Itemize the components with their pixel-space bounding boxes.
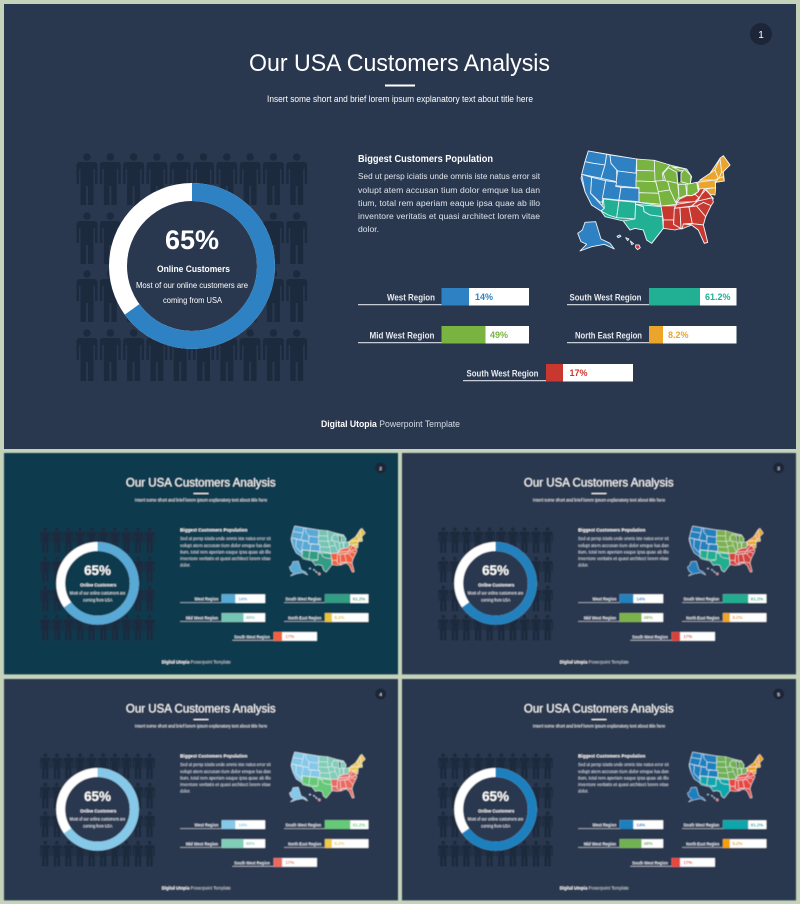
slide 5: navy thumbnail, vivid palette: 65% — [482, 789, 509, 804]
slide 3: navy thumbnail: South West Region — [632, 634, 668, 639]
slide 5: navy thumbnail, vivid palette: 17% — [683, 860, 692, 865]
slide 3: navy thumbnail: Mid West Region — [584, 615, 616, 620]
slide 4: navy thumbnail, pastel palette: 8.2% — [334, 841, 345, 846]
slide 3: navy thumbnail: tium, total rem aperiam eaque ipsa quae ab illo — [578, 549, 669, 554]
slide 4: navy thumbnail, pastel palette: Insert some short and brief lorem ipsum explanatory text about title here — [135, 724, 268, 729]
donut chart: 65% online customers — [118, 192, 266, 340]
slide 4: navy thumbnail, pastel palette: 17% — [285, 860, 294, 865]
bar: North East Region 8.2% — [567, 326, 736, 344]
slide 1: main navy slide — [4, 4, 796, 449]
text block: biggest customers population: Sed ut persp iciatis unde omnis iste natus error sit — [358, 171, 541, 181]
donut chart: 65% online customers: 65% — [165, 225, 219, 255]
slide 4: navy thumbnail, pastel palette: Sed ut persp iciatis unde omnis iste natus error sit — [180, 762, 271, 767]
slide 5: navy thumbnail, vivid palette: 14% — [636, 822, 645, 827]
slide 4: navy thumbnail, pastel palette: North East Region — [288, 841, 322, 846]
slide 2: teal thumbnail: West Region — [195, 596, 219, 601]
subtitle: Insert some short and brief lorem ipsum explanatory text about title here — [267, 94, 533, 104]
slide 5: navy thumbnail, vivid palette: 49% — [644, 841, 653, 846]
slide 4: navy thumbnail, pastel palette: Digital Utopia Powerpoint Template — [162, 885, 231, 890]
slide 3: navy thumbnail — [402, 453, 796, 674]
slide 5: navy thumbnail, vivid palette: Digital Utopia Powerpoint Template — [560, 885, 629, 890]
slide 4: navy thumbnail, pastel palette: 4 — [379, 692, 382, 698]
slide 2: teal thumbnail: dolor. — [180, 562, 191, 567]
slide 2: teal thumbnail: Our USA Customers Analysis — [126, 475, 276, 489]
slide 5: navy thumbnail, vivid palette: Most of our online customers are — [468, 816, 524, 821]
title: Our USA Customers Analysis — [249, 50, 550, 77]
slide 3: navy thumbnail: 49% — [644, 615, 653, 620]
slide 2: teal thumbnail: 49% — [246, 615, 255, 620]
slide 5: navy thumbnail, vivid palette: Insert some short and brief lorem ipsum explanatory text about title here — [533, 724, 666, 729]
slide 4: navy thumbnail, pastel palette — [4, 679, 398, 900]
page number badge — [750, 23, 772, 45]
slide 5: navy thumbnail, vivid palette: coming from USA — [481, 824, 511, 829]
slide 5: navy thumbnail, vivid palette: Biggest Customers Population — [578, 754, 645, 760]
slide 3: navy thumbnail: 65% — [482, 563, 509, 578]
slide 4: navy thumbnail, pastel palette: coming from USA — [83, 824, 113, 829]
slide 4: navy thumbnail, pastel palette: South West Region — [234, 860, 270, 865]
slide 2: teal thumbnail: volupt atem accusan tium dolor emque lua dan — [180, 543, 271, 548]
bar: Mid West Region 49%: 49% — [490, 330, 508, 340]
slide 3: navy thumbnail: Insert some short and brief lorem ipsum explanatory text about title here — [533, 498, 666, 503]
slide 4: navy thumbnail, pastel palette: Most of our online customers are — [70, 816, 126, 821]
slide 2: teal thumbnail: North East Region — [288, 615, 322, 620]
bar: West Region 14%: 14% — [475, 292, 493, 302]
slide background — [4, 4, 796, 449]
bar: Mid West Region 49%: Mid West Region — [370, 330, 434, 340]
slide 2: teal thumbnail: 14% — [238, 596, 247, 601]
slide 3: navy thumbnail: 14% — [636, 596, 645, 601]
slide 3: navy thumbnail: coming from USA — [481, 598, 511, 603]
slide 2: teal thumbnail: Biggest Customers Population — [180, 528, 247, 534]
slide 5: navy thumbnail, vivid palette: tium, total rem aperiam eaque ipsa quae ab illo — [578, 775, 669, 780]
bar: West Region 14% — [358, 288, 529, 306]
slide 5: navy thumbnail, vivid palette: inventore veritatis et quasi architect lorem vitae — [578, 782, 669, 787]
bar: South West Region 61.2% — [567, 288, 736, 306]
bar: South West Region 61.2%: South West Region — [570, 292, 642, 302]
slide 3: navy thumbnail: inventore veritatis et quasi architect lorem vitae — [578, 556, 669, 561]
slide 3: navy thumbnail: dolor. — [578, 562, 589, 567]
slide 2: teal thumbnail: tium, total rem aperiam eaque ipsa quae ab illo — [180, 549, 271, 554]
slide 4: navy thumbnail, pastel palette: 61.2% — [353, 822, 365, 827]
slide 2: teal thumbnail: 65% — [84, 563, 111, 578]
text block: biggest customers population — [358, 154, 541, 234]
slide 2: teal thumbnail: South West Region — [285, 596, 321, 601]
slide 5: navy thumbnail, vivid palette: Sed ut persp iciatis unde omnis iste natus error sit — [578, 762, 669, 767]
slide 5: navy thumbnail, vivid palette: South West Region — [632, 860, 668, 865]
slide 2: teal thumbnail: Digital Utopia Powerpoint Template — [162, 659, 231, 664]
slide 2: teal thumbnail: Most of our online customers are — [70, 590, 126, 595]
slide 2: teal thumbnail: 17% — [285, 634, 294, 639]
slide 5: navy thumbnail, vivid palette: West Region — [593, 822, 617, 827]
slide 5: navy thumbnail, vivid palette: South West Region — [683, 822, 719, 827]
slide 2: teal thumbnail: 8.2% — [334, 615, 345, 620]
slide 3: navy thumbnail: volupt atem accusan tium dolor emque lua dan — [578, 543, 669, 548]
slide 3: navy thumbnail: Our USA Customers Analysis — [524, 475, 674, 489]
slide 3: navy thumbnail: Most of our online customers are — [468, 590, 524, 595]
bar: South West Region 61.2%: 61.2% — [705, 292, 731, 302]
slide 3: navy thumbnail: Sed ut persp iciatis unde omnis iste natus error sit — [578, 536, 669, 541]
bar: West Region 14%: West Region — [387, 292, 435, 302]
slide 4: navy thumbnail, pastel palette: 14% — [238, 822, 247, 827]
bar: North East Region 8.2%: North East Region — [575, 330, 642, 340]
slide 4: navy thumbnail, pastel palette: Our USA Customers Analysis — [126, 701, 276, 715]
footer: Digital Utopia Powerpoint Template — [321, 419, 460, 429]
slide 2: teal thumbnail: 61.2% — [353, 596, 365, 601]
text block: biggest customers population: inventore veritatis et quasi architect lorem vitae — [358, 211, 540, 221]
bar: North East Region 8.2%: 8.2% — [668, 330, 689, 340]
slide 4: navy thumbnail, pastel palette: Online Customers — [80, 808, 117, 813]
slide 4: navy thumbnail, pastel palette: West Region — [195, 822, 219, 827]
text block: biggest customers population: Biggest Customers Population — [358, 154, 493, 165]
slide 3: navy thumbnail: Digital Utopia Powerpoint Template — [560, 659, 629, 664]
bar: South West Region 17%: South West Region — [466, 368, 538, 378]
slide 2: teal thumbnail: 2 — [379, 466, 382, 472]
slide 4: navy thumbnail, pastel palette: inventore veritatis et quasi architect lorem vitae — [180, 782, 271, 787]
text block: biggest customers population: dolor. — [358, 224, 379, 234]
icon: crowd of people — [76, 153, 307, 381]
text block: biggest customers population: tium, total rem aperiam eaque ipsa quae ab illo — [358, 198, 540, 208]
title underline — [385, 84, 415, 86]
slide 3: navy thumbnail: South West Region — [683, 596, 719, 601]
slide 5: navy thumbnail, vivid palette: Online Customers — [478, 808, 515, 813]
slide 2: teal thumbnail: Insert some short and brief lorem ipsum explanatory text about title here — [135, 498, 268, 503]
slide 3: navy thumbnail: 8.2% — [732, 615, 743, 620]
slide 5: navy thumbnail, vivid palette: Mid West Region — [584, 841, 616, 846]
slide 2: teal thumbnail: Mid West Region — [186, 615, 218, 620]
slide 3: navy thumbnail: 61.2% — [751, 596, 763, 601]
slide 2: teal thumbnail: inventore veritatis et quasi architect lorem vitae — [180, 556, 271, 561]
slide 4: navy thumbnail, pastel palette: 49% — [246, 841, 255, 846]
slide 3: navy thumbnail: Biggest Customers Population — [578, 528, 645, 534]
slide 5: navy thumbnail, vivid palette: 5 — [777, 692, 780, 698]
text block: biggest customers population: volupt atem accusan tium dolor emque lua dan — [358, 185, 540, 195]
donut chart: 65% online customers: Most of our online customers are — [136, 280, 248, 290]
bar: Mid West Region 49% — [358, 326, 529, 344]
slide 4: navy thumbnail, pastel palette: tium, total rem aperiam eaque ipsa quae ab illo — [180, 775, 271, 780]
slide 2: teal thumbnail: coming from USA — [83, 598, 113, 603]
slide 5: navy thumbnail, vivid palette: 61.2% — [751, 822, 763, 827]
slide 5: navy thumbnail, vivid palette: volupt atem accusan tium dolor emque lua dan — [578, 769, 669, 774]
slide 3: navy thumbnail: West Region — [593, 596, 617, 601]
donut chart: 65% online customers: Online Customers — [157, 264, 230, 274]
slide 2: teal thumbnail: Sed ut persp iciatis unde omnis iste natus error sit — [180, 536, 271, 541]
slide 2: teal thumbnail: Online Customers — [80, 582, 117, 587]
slide 4: navy thumbnail, pastel palette: South West Region — [285, 822, 321, 827]
slide 5: navy thumbnail, vivid palette: North East Region — [686, 841, 720, 846]
donut chart: 65% online customers: coming from USA — [163, 295, 222, 305]
slide 5: navy thumbnail, vivid palette: Our USA Customers Analysis — [524, 701, 674, 715]
USA regions map — [578, 151, 730, 251]
slide 5: navy thumbnail, vivid palette — [402, 679, 796, 900]
slide 3: navy thumbnail: Online Customers — [478, 582, 515, 587]
slide 2: teal thumbnail — [4, 453, 398, 674]
slide 3: navy thumbnail: 3 — [777, 466, 780, 472]
page number badge: 1 — [758, 30, 764, 41]
slide 4: navy thumbnail, pastel palette: 65% — [84, 789, 111, 804]
bar: South West Region 17% — [463, 364, 633, 382]
slide 4: navy thumbnail, pastel palette: Mid West Region — [186, 841, 218, 846]
slide 5: navy thumbnail, vivid palette: 8.2% — [732, 841, 743, 846]
slide 4: navy thumbnail, pastel palette: Biggest Customers Population — [180, 754, 247, 760]
bar: South West Region 17%: 17% — [570, 368, 588, 378]
slide 3: navy thumbnail: 17% — [683, 634, 692, 639]
slide 5: navy thumbnail, vivid palette: dolor. — [578, 788, 589, 793]
slide 3: navy thumbnail: North East Region — [686, 615, 720, 620]
slide 2: teal thumbnail: South West Region — [234, 634, 270, 639]
slide 4: navy thumbnail, pastel palette: volupt atem accusan tium dolor emque lua dan — [180, 769, 271, 774]
slide 4: navy thumbnail, pastel palette: dolor. — [180, 788, 191, 793]
